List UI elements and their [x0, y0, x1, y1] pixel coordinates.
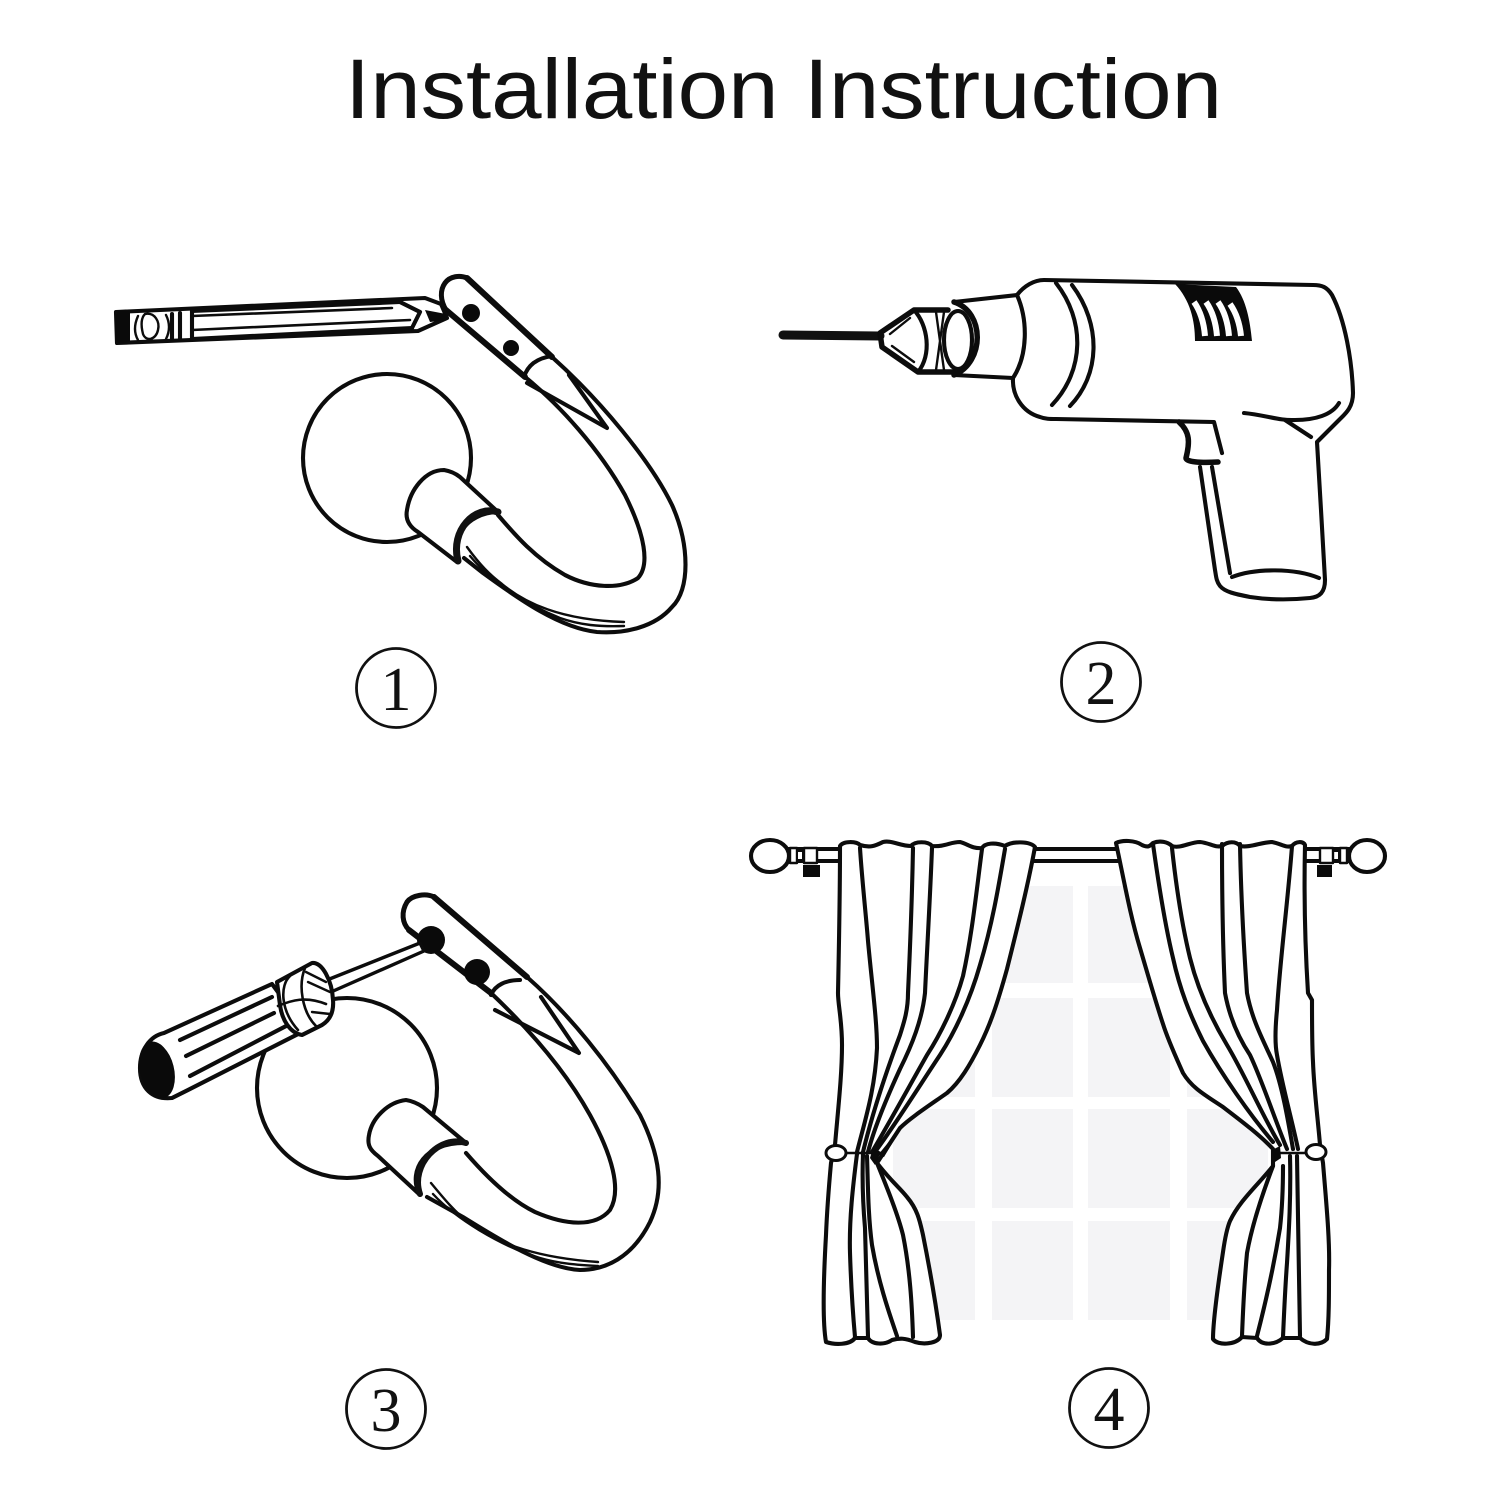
icon: right curtain: [1116, 841, 1329, 1344]
icon: drill chuck: [880, 295, 1017, 378]
step number 3: 3: [370, 1377, 402, 1445]
icon: tieback ball base: [303, 374, 471, 542]
icon: right finial: [1317, 840, 1385, 877]
step number 1: [356, 648, 436, 728]
icon: tieback hook: [407, 276, 686, 632]
icon: drill trigger: [1179, 422, 1218, 462]
title: Installation Instruction: [345, 42, 1222, 136]
step number 4: 4: [1094, 1376, 1124, 1444]
icon: left curtain: [824, 842, 1035, 1344]
icon: drill vent: [1175, 284, 1252, 341]
step number 1: 1: [380, 656, 412, 724]
icon: tieback ball base: [257, 998, 437, 1178]
step number 2: 2: [1086, 650, 1116, 718]
curtain rod: [788, 849, 1350, 861]
step number 4: [1070, 1368, 1148, 1448]
icon: drill bit: [783, 335, 880, 336]
step number 2: [1062, 642, 1140, 722]
window panes: [893, 886, 1268, 1320]
icon: left finial: [751, 840, 820, 877]
panel: step 2 drill hole: [783, 280, 1353, 599]
panel: step 1 mark hole with pencil: [115, 276, 686, 632]
icon: screwdriver: [133, 943, 424, 1102]
panel: step 4 finished curtains: [751, 840, 1385, 1344]
icon: tieback hook: [368, 895, 659, 1270]
step number 3: [346, 1370, 426, 1448]
icon: drill body: [1013, 280, 1353, 599]
panel: step 3 fix with screwdriver: [133, 895, 659, 1270]
icon: pencil: [115, 298, 447, 343]
